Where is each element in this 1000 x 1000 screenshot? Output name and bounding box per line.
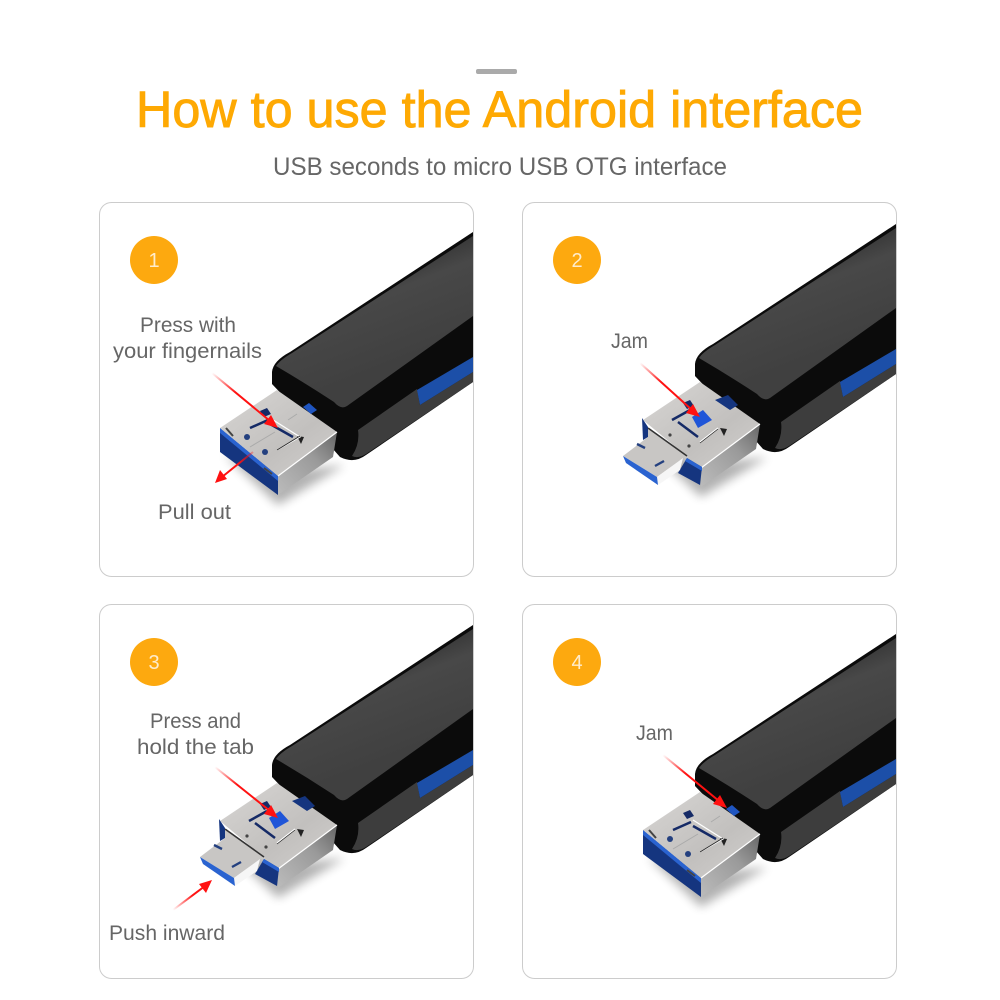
title: How to use the Android interface: [136, 81, 863, 138]
step 1 arrow: pull: [215, 452, 253, 483]
step 3 arrow: push: [173, 880, 212, 910]
step 1 arrow: press: [212, 373, 278, 428]
panel: step 2: [522, 202, 896, 576]
decorative top bar: [476, 69, 517, 74]
step 3 badge: 3: [148, 652, 160, 674]
panel: step 4: [522, 604, 896, 978]
panel: step 1: [100, 202, 474, 576]
step 2 arrow: [640, 363, 700, 417]
step 1 USB drive: [220, 232, 473, 505]
step 1 label: press: Press with: [140, 314, 236, 337]
step 1 badge: [130, 236, 178, 284]
step 2 USB drive: [623, 224, 896, 497]
step 2 badge: 2: [571, 250, 583, 272]
step 1 label: press: your fingernails: [113, 340, 262, 363]
panel: step 3: [100, 604, 474, 978]
step 4 USB drive: [643, 634, 896, 907]
step 4 badge: 4: [571, 652, 583, 674]
subtitle: USB seconds to micro USB OTG interface: [273, 153, 727, 181]
step 4 badge: [553, 638, 601, 686]
step 2 badge: [553, 236, 601, 284]
step 1 label: pull out: Pull out: [158, 501, 231, 524]
step 3 label: press: hold the tab: [137, 736, 254, 759]
step 3 label: press: Press and: [150, 710, 241, 733]
step 2 label: Jam: [611, 330, 648, 353]
step 3 badge: [130, 638, 178, 686]
step 3 USB drive: [200, 625, 473, 898]
step 1 badge: 1: [148, 250, 160, 272]
step 3 arrow: press: [215, 767, 278, 818]
step 4 arrow: [663, 755, 727, 808]
step 3 label: push: Push inward: [109, 922, 225, 945]
step 4 label: Jam: [636, 722, 673, 745]
